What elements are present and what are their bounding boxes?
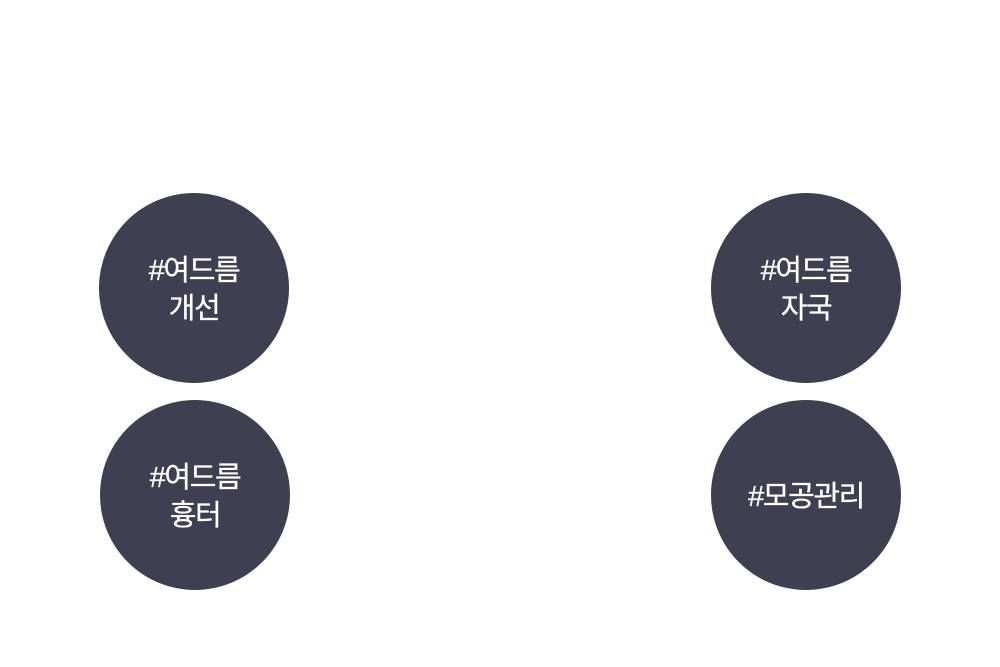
label: acne improvement bbox=[148, 255, 240, 325]
circle: pore care bbox=[711, 400, 901, 590]
circle: acne irritation bbox=[711, 193, 901, 383]
label: acne improvement: #여드름 bbox=[149, 255, 239, 287]
label: acne scars: 흉터 bbox=[170, 500, 220, 532]
label: acne scars bbox=[150, 462, 240, 532]
label: acne irritation: #여드름 bbox=[761, 255, 851, 287]
label: acne irritation bbox=[760, 255, 852, 325]
circle: acne improvement bbox=[99, 193, 289, 383]
circle: acne scars bbox=[100, 400, 290, 590]
label: pore care: #모공관리 bbox=[748, 481, 864, 513]
label: acne scars: #여드름 bbox=[150, 462, 240, 494]
label: acne irritation: 자국 bbox=[781, 293, 831, 325]
label: acne improvement: 개선 bbox=[169, 293, 219, 325]
